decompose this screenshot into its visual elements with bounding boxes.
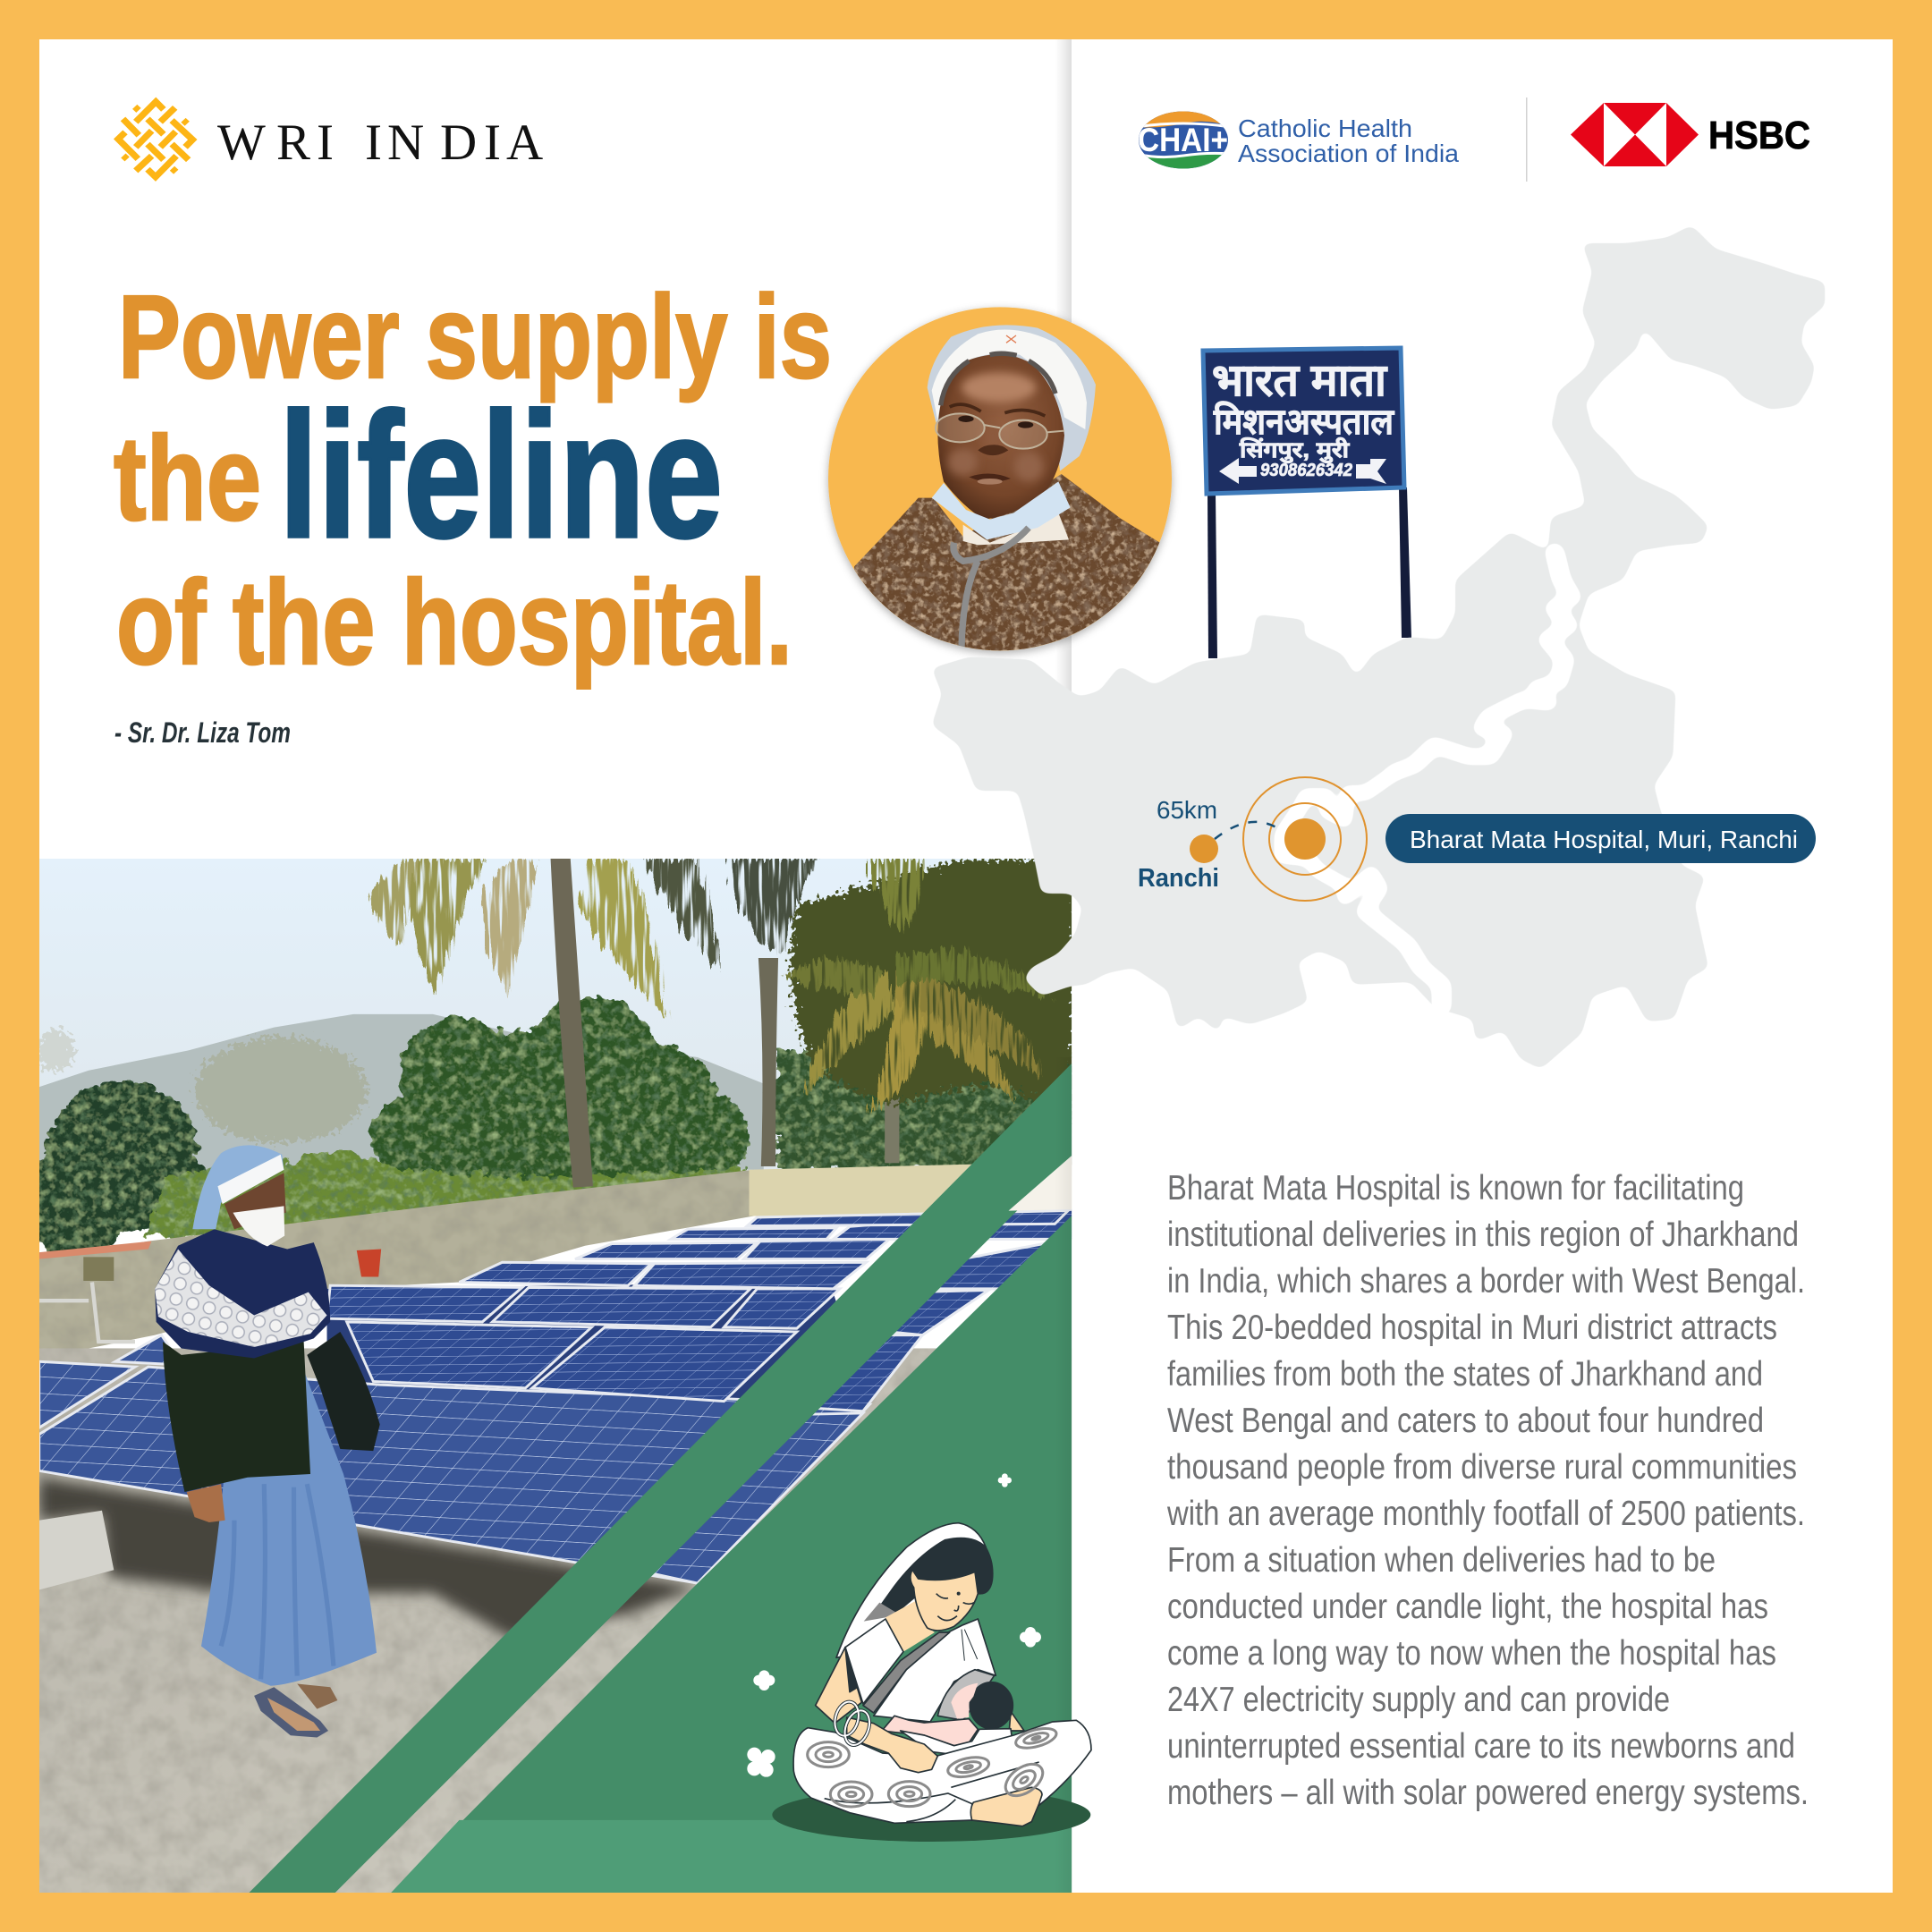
face	[911, 1570, 978, 1631]
logo: CHAI	[1136, 111, 1459, 170]
body text: in India, which shares a border with West Bengal.	[1167, 1262, 1805, 1301]
scarf	[155, 1229, 330, 1359]
panel divider shadow	[1055, 39, 1072, 859]
veil	[192, 1145, 284, 1229]
blue dress	[201, 1361, 377, 1686]
neck and chest	[886, 1601, 935, 1652]
map landmass	[932, 225, 1825, 1069]
nun figure	[155, 1145, 380, 1737]
dark cardigan	[163, 1342, 310, 1492]
Ranchi marker	[1190, 835, 1218, 863]
photo: nun walking by rooftop solar panels	[20, 859, 1074, 1897]
target rings	[1243, 777, 1367, 901]
logo: WRI India	[118, 102, 543, 177]
large tree	[372, 996, 750, 1196]
bangle highlights	[831, 1699, 874, 1749]
HSBC wordmark: HSBC	[1708, 114, 1810, 157]
paisley shawl	[852, 474, 1160, 662]
logo divider	[1526, 97, 1528, 182]
sign lettering	[1212, 355, 1395, 480]
yellow disc	[828, 307, 1172, 650]
nose	[978, 445, 1008, 455]
hospital label pill: Bharat Mata Hospital, Muri, Ranchi	[1410, 826, 1798, 853]
roof surface	[36, 1348, 1074, 1897]
mountains	[39, 1014, 764, 1170]
face	[937, 354, 1064, 520]
illustration: mother nursing baby	[747, 1473, 1091, 1842]
palm trunks	[551, 859, 593, 1188]
body text	[1166, 1169, 1809, 1812]
foot	[970, 1787, 1042, 1826]
veil	[836, 1523, 986, 1657]
light green band	[386, 1820, 1074, 1897]
Ranchi label: Ranchi	[1138, 864, 1219, 893]
white collar	[963, 513, 1069, 545]
body text: families from both the states of Jharkhand and	[1167, 1355, 1763, 1394]
logo wordmark: WRI INDIA	[217, 114, 543, 171]
body text: uninterrupted essential care to its newborns and	[1167, 1727, 1795, 1766]
sign board	[1203, 348, 1404, 494]
inner veil	[864, 1603, 896, 1622]
distance label: 65km	[1157, 796, 1217, 824]
hospital location marker	[1284, 818, 1326, 860]
sky	[36, 859, 1074, 1176]
body text: This 20-bedded hospital in Muri district attracts	[1167, 1309, 1777, 1347]
back right foliage	[764, 1051, 1074, 1170]
distance arc	[1215, 822, 1282, 839]
emblem lettering: CHAI+	[1138, 122, 1228, 158]
swaddle	[901, 1729, 1013, 1755]
organisation name: Catholic Health	[1238, 114, 1412, 142]
junction box and pipes	[39, 1257, 135, 1342]
sandals and feet	[254, 1684, 337, 1737]
heading: of the hospital.	[116, 556, 792, 690]
veil	[928, 325, 1096, 471]
baby	[882, 1670, 1013, 1755]
concrete block	[39, 1511, 114, 1589]
face	[225, 1173, 286, 1229]
attribution: - Sr. Dr. Liza Tom	[114, 716, 291, 749]
logo: HSBC	[1571, 103, 1810, 166]
green triangle	[386, 1213, 1074, 1897]
sign lettering: सिंगपुर, मुरी	[1239, 437, 1350, 463]
baby face	[951, 1683, 978, 1719]
hand	[187, 1484, 225, 1522]
heading: lifeline	[279, 377, 723, 575]
right palm leaves	[784, 859, 1055, 1114]
photo: hospital sign	[1203, 348, 1411, 658]
sign lettering: मिशनअस्पताल	[1213, 401, 1395, 442]
hedge	[148, 1150, 750, 1236]
facial features	[936, 1594, 974, 1621]
grey hair	[941, 353, 1055, 405]
solar panels	[39, 1209, 1074, 1583]
sign lettering: 9308626342	[1260, 461, 1352, 480]
rooftop wall	[39, 1162, 1074, 1359]
sari drape	[874, 1619, 996, 1722]
lips	[969, 474, 1011, 482]
icon: woven diamond	[118, 102, 192, 177]
body text: 24X7 electricity supply and can provide	[1167, 1681, 1670, 1719]
palm fronds	[370, 859, 817, 1018]
body text: Bharat Mata Hospital is known for facilitating	[1167, 1169, 1744, 1208]
body text: conducted under candle light, the hospital has	[1167, 1588, 1768, 1626]
portrait: Sr. Dr. Liza Tom	[828, 307, 1172, 662]
body text: come a long way to now when the hospital has	[1167, 1634, 1776, 1673]
wall gap highlight	[1009, 1153, 1074, 1211]
right hand	[847, 1717, 937, 1773]
forearm and folder	[307, 1332, 380, 1451]
left arm	[816, 1648, 861, 1724]
body text: institutional deliveries in this region of Jharkhand	[1167, 1216, 1799, 1254]
icon: CHAI emblem	[1136, 111, 1231, 170]
heading	[114, 271, 832, 690]
right palm crown	[791, 859, 1074, 1123]
hair	[879, 1538, 993, 1613]
cross on veil	[1006, 335, 1016, 343]
face highlights	[948, 373, 1044, 481]
sari spiral prints	[808, 1724, 1058, 1807]
river boundary	[1282, 551, 1572, 1008]
body text: West Bengal and caters to about four hundred	[1167, 1402, 1764, 1440]
sign lettering: भारत माता	[1212, 355, 1388, 405]
ground shadow	[772, 1788, 1090, 1842]
body text: From a situation when deliveries had to be	[1167, 1541, 1716, 1580]
glasses	[936, 413, 1064, 449]
body text: mothers – all with solar powered energy systems.	[1167, 1774, 1809, 1812]
nursing breast	[937, 1670, 995, 1720]
logo: CHAI: Association of India	[1238, 140, 1459, 167]
figure	[793, 1523, 1091, 1826]
bare tree	[37, 1030, 367, 1143]
red bucket	[357, 1249, 381, 1277]
surgical mask	[932, 481, 1071, 539]
heading: Power supply is	[118, 271, 832, 402]
roof dark patch	[39, 1478, 698, 1640]
crossed legs	[793, 1720, 1091, 1823]
hospital label pill	[1385, 814, 1816, 863]
portrait figure	[852, 325, 1160, 662]
baby head	[970, 1682, 1013, 1729]
baby body	[882, 1716, 978, 1746]
stethoscope	[953, 528, 1029, 647]
icon: hexagon	[1571, 103, 1699, 166]
bangles	[831, 1699, 874, 1749]
eyebrows	[950, 404, 1045, 416]
dress folds	[221, 1484, 334, 1679]
drape fold lines	[962, 1630, 978, 1661]
white headband	[932, 329, 1087, 429]
scarf dotted band	[155, 1249, 327, 1347]
blouse	[845, 1619, 903, 1704]
grey sash	[863, 1632, 950, 1713]
body text: thousand people from diverse rural communities	[1167, 1448, 1797, 1487]
green diagonal strip	[244, 1061, 1074, 1897]
white flowers	[747, 1473, 1041, 1777]
eyes	[958, 416, 1033, 428]
left trees	[39, 1080, 207, 1252]
edge shade	[1055, 1057, 1072, 1897]
leg fold lines	[825, 1762, 1039, 1822]
map: Jharkhand and West Bengal	[932, 225, 1825, 1069]
sign arrows	[1219, 458, 1386, 484]
sign posts	[1208, 487, 1411, 658]
body text: with an average monthly footfall of 2500 patients.	[1166, 1495, 1805, 1533]
right shoulder skin	[1009, 1711, 1024, 1731]
face mask	[233, 1206, 284, 1247]
heading: the	[114, 412, 261, 546]
